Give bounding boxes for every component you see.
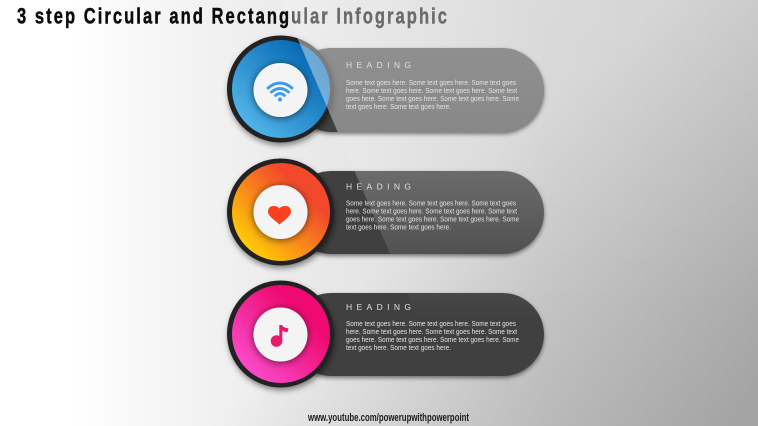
text block: step 3: goes here. Some text goes here. Some text goes here. Some [346, 337, 519, 344]
light beam overlay [297, 38, 544, 254]
text block: step 2: goes here. Some text goes here. Some text goes here. Some [346, 216, 519, 224]
text block: step 2 [346, 182, 519, 232]
text block: step 3: HEADING [346, 302, 411, 312]
panel: pill 1 [290, 48, 544, 132]
icon: heart [268, 206, 291, 224]
text block: step 3 [346, 302, 519, 352]
text block: step 2: here. Some text goes here. Some text goes here. Some text [346, 208, 517, 216]
icon: music note [271, 325, 288, 347]
text block: step 2: Some text goes here. Some text goes here. Some text goes [346, 200, 517, 208]
icon: wifi [268, 83, 292, 102]
text block: step 2: text goes here. Some text goes here. [346, 224, 451, 232]
text block: step 1 [346, 60, 519, 111]
text block: step 1: here. Some text goes here. Some text goes here. Some text [346, 88, 517, 95]
text block: step 2: HEADING [346, 182, 411, 192]
text block: step 3: text goes here. Some text goes here. [346, 345, 451, 352]
text block: step 1: Some text goes here. Some text goes here. Some text goes [346, 80, 517, 87]
text block: step 1: HEADING [346, 60, 411, 70]
circle: orange step [227, 158, 334, 266]
circle: pink step [227, 280, 334, 388]
panel: pill 3 [290, 293, 544, 376]
title: 3 step Circular and Rectangular Infographic [17, 4, 449, 28]
circle: blue step [227, 36, 334, 142]
text block: step 3: Some text goes here. Some text goes here. Some text goes [346, 321, 517, 328]
text block: step 1: text goes here. Some text goes here. [346, 104, 451, 111]
footer url: www.youtube.com/powerupwithpowerpoint [307, 412, 469, 424]
text block: step 3: here. Some text goes here. Some text goes here. Some text [346, 329, 517, 336]
text block: step 1: goes here. Some text goes here. Some text goes here. Some [346, 96, 519, 103]
panel: pill 2 [290, 171, 544, 254]
